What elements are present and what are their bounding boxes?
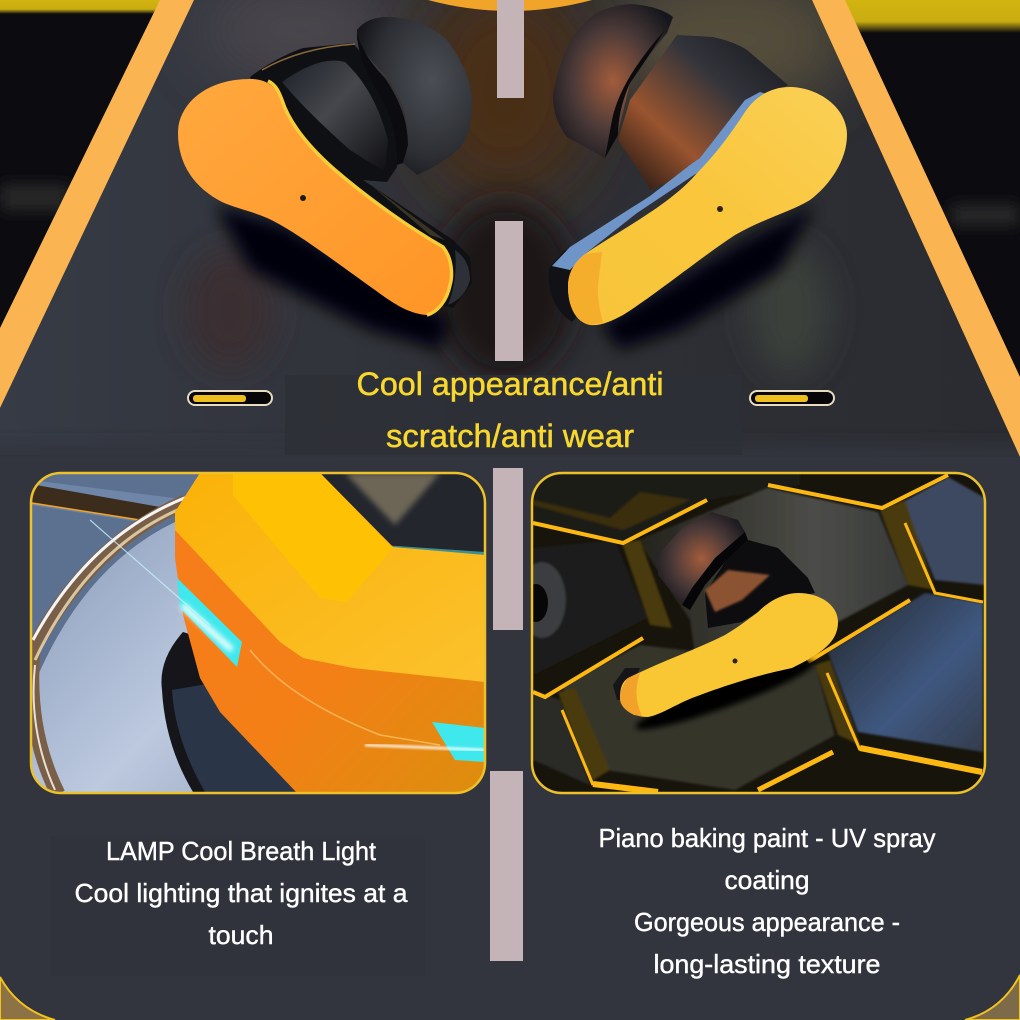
left earbud: [178, 17, 472, 315]
text block: piano baking paint: Piano baking paint - UV spray: [598, 823, 936, 853]
right stem: [568, 87, 847, 325]
earbud body: [705, 540, 815, 628]
right stem dark tail: [549, 250, 590, 322]
text block: piano baking paint: [598, 823, 936, 979]
text block: LAMP breath light: Cool lighting that ignites at a: [74, 878, 408, 908]
text block: LAMP breath light: LAMP Cool Breath Light: [106, 836, 377, 866]
heading: cool appearance: Cool appearance/anti: [356, 366, 664, 402]
cyan light strip right: [432, 722, 485, 762]
right stem metal strip: [552, 92, 770, 270]
cyan light strip: [177, 578, 242, 667]
text block: piano baking paint: long-lasting texture: [654, 949, 880, 979]
right earbud: [549, 4, 847, 325]
earbud stem: [613, 668, 640, 700]
case top surface: [175, 473, 485, 682]
right earbud body: [618, 35, 788, 190]
left stem: [178, 79, 452, 315]
honeycomb side walls: [558, 500, 935, 782]
earbud tip: [658, 512, 745, 605]
left earbud body: [250, 43, 472, 308]
left ear tip: [357, 17, 472, 175]
case dark recess: [320, 473, 485, 555]
heading: cool appearance: [356, 366, 664, 454]
background ear tip: [533, 562, 566, 638]
photo panel: charging case: [31, 473, 485, 800]
bottom right corner: [965, 975, 1020, 1020]
left orange band: [0, 0, 194, 408]
bottom left corner: [0, 977, 55, 1020]
heading: cool appearance: scratch/anti wear: [386, 418, 634, 454]
case side: [175, 473, 485, 793]
text block: LAMP breath light: touch: [208, 920, 274, 950]
text block: piano baking paint: coating: [724, 865, 810, 895]
heading background box: [285, 375, 742, 455]
indicator pill left: [188, 391, 272, 405]
photo panel: earbud on honeycomb: [518, 473, 985, 793]
centre vertical divider bars: [490, 0, 524, 961]
right ear tip: [553, 4, 673, 158]
text block: LAMP breath light: [50, 836, 425, 976]
indicator pill right: [750, 391, 834, 405]
text block: piano baking paint: Gorgeous appearance -: [634, 907, 900, 937]
right orange band: [812, 0, 1020, 457]
top centre arc: [428, 0, 592, 11]
